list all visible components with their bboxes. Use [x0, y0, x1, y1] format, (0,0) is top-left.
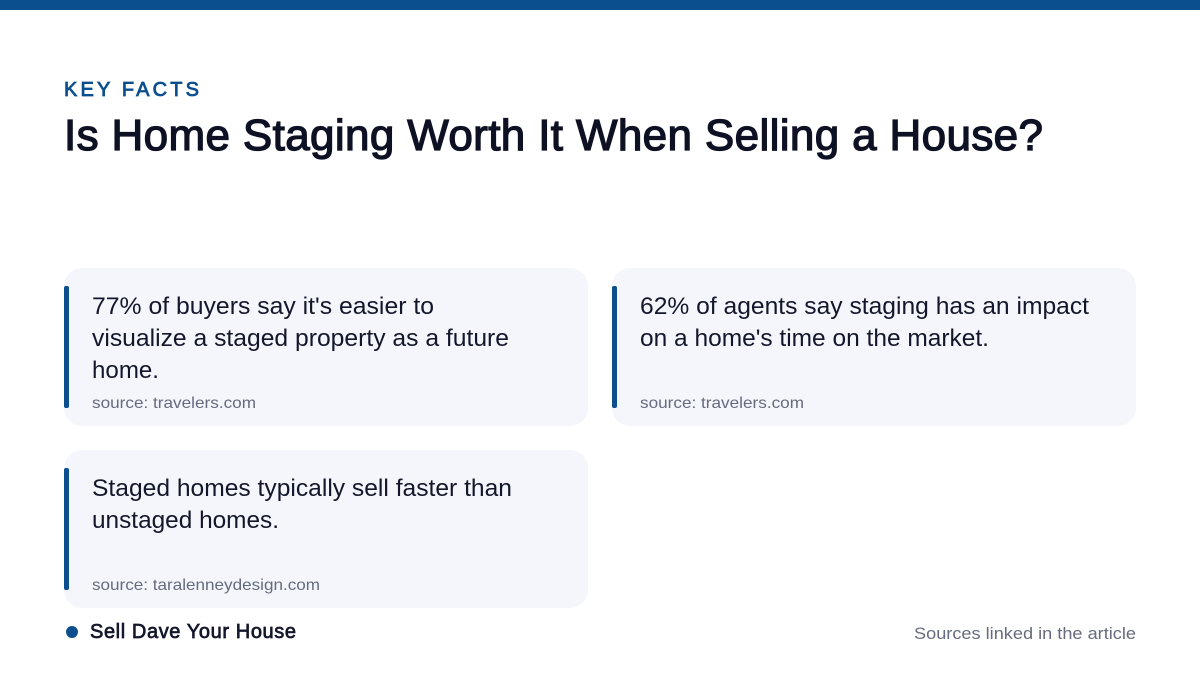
accent bar [612, 286, 617, 408]
source line: source: taralenneydesign.com [92, 577, 320, 594]
footer sources note: Sources linked in the article [914, 624, 1136, 643]
panel: faster sales fact card [64, 450, 588, 608]
fact text: 62% of agents say staging has an impact [640, 293, 1089, 320]
fact text [92, 293, 509, 384]
accent bar [64, 468, 69, 590]
card background [64, 450, 588, 608]
title: Is Home Staging Worth It When Selling a House? [64, 111, 1043, 160]
source line: source: travelers.com [640, 395, 804, 412]
fact text [640, 293, 1089, 352]
fact text: Staged homes typically sell faster than [92, 475, 512, 502]
footer brand [66, 621, 296, 643]
card background [64, 268, 588, 426]
accent bar [64, 286, 69, 408]
fact text: on a home's time on the market. [640, 325, 989, 352]
panel: buyers fact card [64, 268, 588, 426]
brand name: Sell Dave Your House [90, 621, 296, 643]
card background [612, 268, 1136, 426]
eyebrow: key facts: KEY FACTS [64, 79, 199, 101]
top accent bar [0, 0, 1200, 10]
panel: agents fact card [612, 268, 1136, 426]
fact text: 77% of buyers say it's easier to [92, 293, 434, 320]
fact text [92, 475, 512, 534]
fact text: home. [92, 357, 159, 384]
fact text: unstaged homes. [92, 507, 279, 534]
source line: source: travelers.com [92, 395, 256, 412]
fact text: visualize a staged property as a future [92, 325, 509, 352]
brand dot [66, 626, 78, 638]
